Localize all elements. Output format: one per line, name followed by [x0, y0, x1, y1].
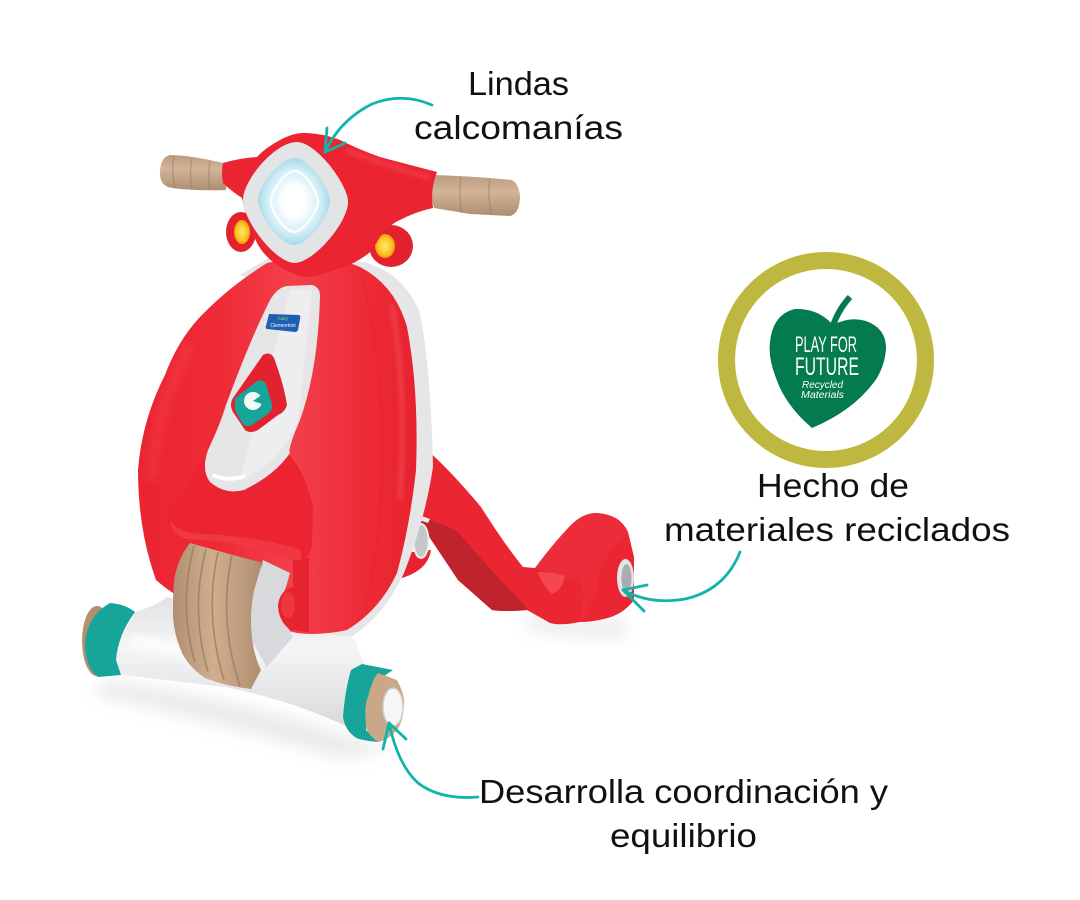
headlight white bezel [243, 142, 348, 263]
blue brand badge: baby [278, 316, 289, 321]
leaf text: PLAY FOR [795, 332, 857, 357]
main front wheel [173, 543, 293, 689]
rear arm and wheel [402, 450, 634, 624]
arrow: bottom, pointing to front wheel [383, 723, 478, 797]
left handlebar grip [160, 155, 228, 190]
scooter head [222, 133, 437, 277]
right teal wheel [343, 664, 404, 742]
olive ring [726, 260, 926, 460]
blue brand badge: Clementoni [270, 323, 296, 329]
label: coordination and balance: equilibrio [610, 817, 757, 854]
leaf text: Recycled [802, 379, 844, 391]
hinge bump [278, 558, 309, 632]
leaf text: Materials [801, 389, 845, 401]
left teal wheel [82, 603, 135, 677]
front fender [167, 442, 313, 560]
main body with white trim [138, 255, 433, 637]
arrow: top, pointing to stickers [325, 98, 432, 152]
badge: Play for Future [726, 260, 926, 460]
blue brand badge [266, 314, 300, 332]
label: recycled materials: materiales reciclados [664, 511, 1010, 548]
leaf text: FUTURE [795, 353, 859, 381]
green leaf [770, 309, 886, 428]
leaf text [795, 332, 859, 401]
T-shaped white base [108, 597, 364, 726]
right handlebar grip [430, 175, 520, 216]
product illustration: red toy scooter [82, 133, 634, 758]
label: stickers: calcomanías [414, 109, 623, 146]
leaf stem [833, 297, 850, 326]
central white panel [205, 285, 320, 491]
left turn signal [226, 212, 256, 252]
arrow: right, pointing to rear wheel [623, 552, 740, 611]
label: stickers: Lindas [468, 65, 569, 102]
red diamond button with teal logo [231, 354, 287, 432]
label: recycled materials: Hecho de [757, 467, 909, 504]
right turn signal [369, 225, 413, 267]
label: coordination and balance: Desarrolla coordinación y [479, 773, 889, 810]
ground shadows [95, 615, 630, 758]
